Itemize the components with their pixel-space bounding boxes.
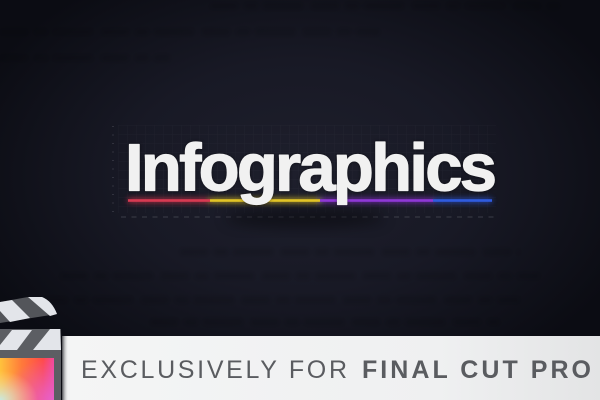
banner text: EXCLUSIVELY FOR [81,356,347,384]
clapper arm [0,297,57,323]
colour underline [128,198,492,202]
gradient screen [0,358,54,400]
banner text: FINAL CUT PRO [362,356,591,384]
title: Infographics [125,130,497,206]
title: Infographics [125,130,497,206]
bottom banner [62,336,600,400]
banner text [81,356,591,384]
clapper body [0,351,61,400]
faint background texture [0,6,560,322]
icon: Final Cut Pro clapperboard [0,297,61,400]
title shadow [225,208,385,228]
clapper top bar [0,329,61,351]
grid behind title [113,125,496,217]
